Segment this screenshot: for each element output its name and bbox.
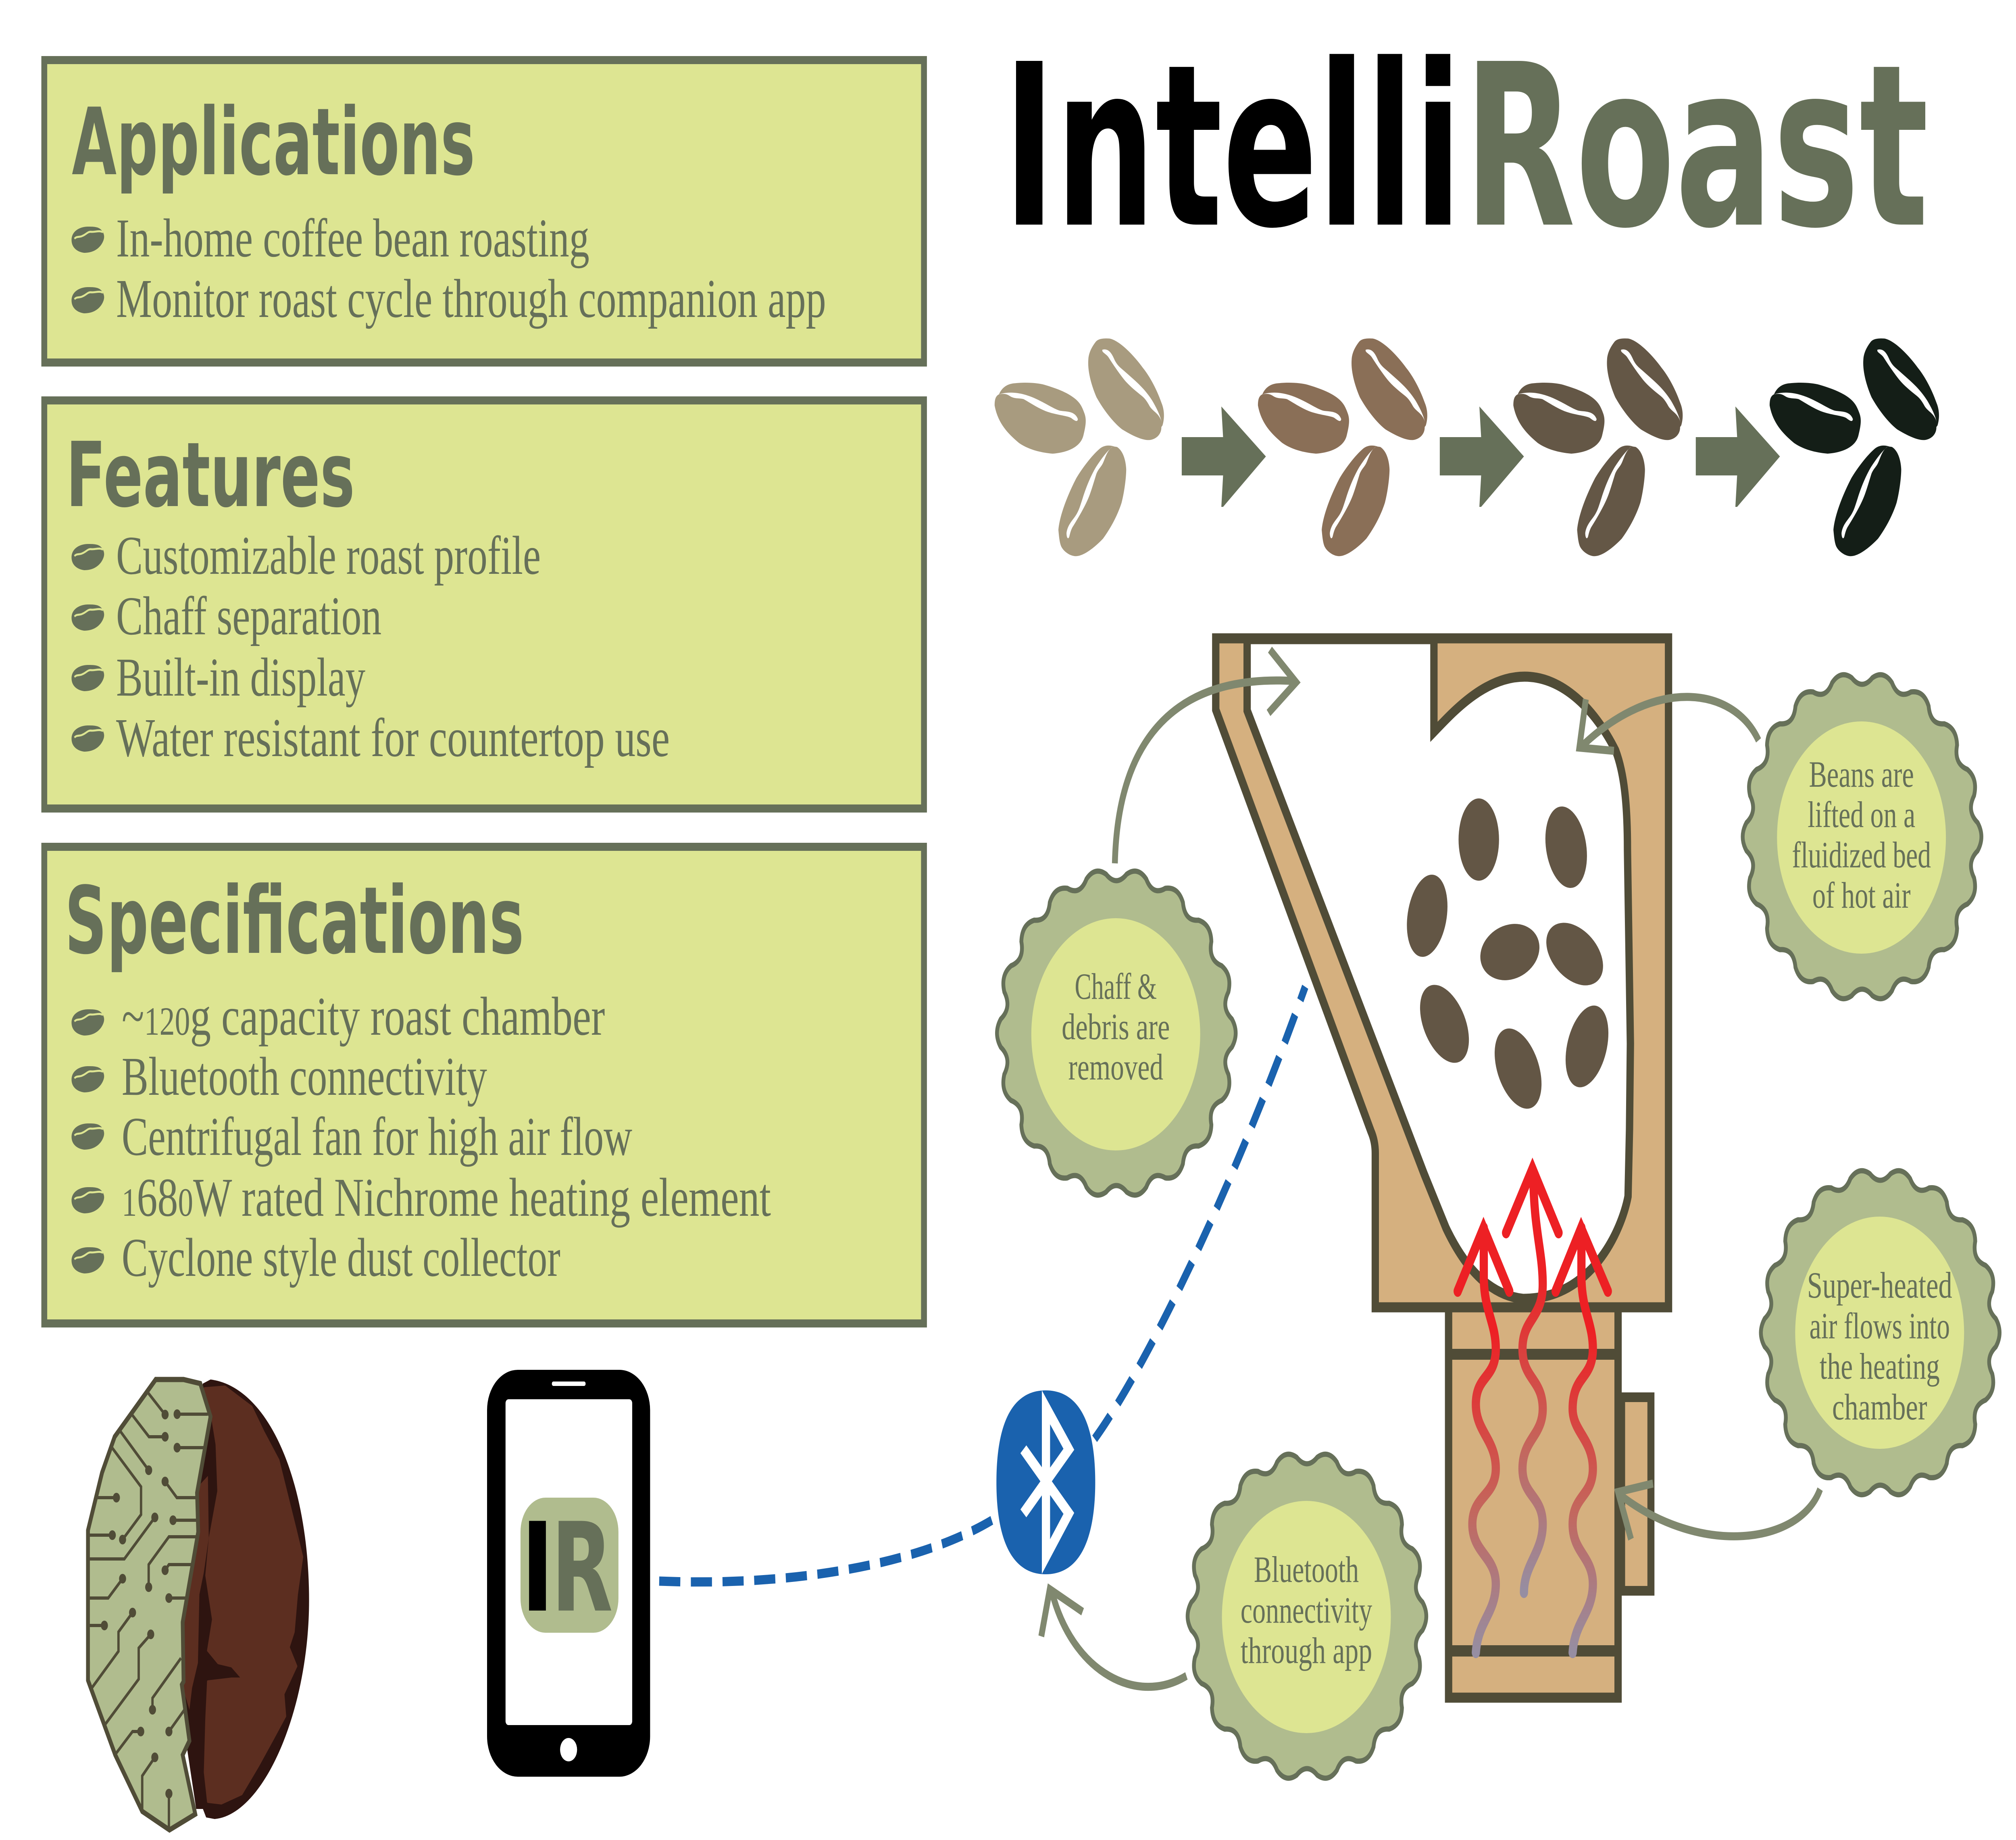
bullet list: features: [71, 525, 670, 768]
arrow: roast step 2: [1440, 406, 1524, 507]
bullet list: specifications: Cyclone style dust collector: [122, 1227, 560, 1288]
callout: beans lifted: [1743, 675, 1981, 999]
panel: applications: [44, 60, 924, 363]
heading: applications: Applications: [72, 88, 475, 196]
callout: chaff and debris: removed: [1068, 1047, 1163, 1088]
callout: super-heated air: Super-heated: [1807, 1265, 1952, 1306]
callout: beans lifted: lifted on a: [1808, 794, 1915, 836]
panel: specifications: [44, 847, 924, 1323]
bullet list: specifications: ~120g capacity roast chamber: [122, 986, 605, 1047]
callout: super-heated air: the heating: [1820, 1346, 1940, 1387]
icon: dark roast beans: [1770, 338, 1939, 556]
bullet list: applications: Monitor roast cycle through companion app: [116, 268, 826, 329]
icon: bluetooth: [996, 1390, 1095, 1574]
heading: specifications: Specifications: [65, 867, 524, 975]
heating chamber: [1445, 1307, 1651, 1698]
bullet list: specifications: [71, 986, 771, 1288]
callout: chaff and debris: [997, 871, 1236, 1195]
callout arrow: bluetooth: [1041, 1589, 1187, 1687]
callout: beans lifted: Beans are: [1809, 754, 1914, 795]
bullet list: specifications: Bluetooth connectivity: [122, 1046, 487, 1107]
callout arrow: chaff to exit: [1115, 650, 1296, 863]
callout: beans lifted: fluidized bed: [1792, 835, 1931, 876]
icon: smartphone with IR app: I: [521, 1496, 554, 1640]
coffee beans in chamber: [1401, 798, 1616, 1120]
arrow: roast step 1: [1182, 406, 1266, 507]
heading: features: Features: [66, 423, 355, 527]
bullet list: applications: In-home coffee bean roasting: [116, 208, 589, 269]
hot air arrows: [1458, 1169, 1608, 1652]
icon: light roast beans: [1258, 338, 1427, 556]
roast progression: beans and arrows: [995, 338, 1939, 556]
arrow: roast step 3: [1696, 406, 1780, 507]
callout: chaff and debris: Chaff &: [1075, 966, 1157, 1007]
callout: bluetooth connectivity: connectivity: [1241, 1590, 1372, 1631]
callout: beans lifted: of hot air: [1812, 875, 1911, 916]
icon: medium roast beans: [1513, 338, 1683, 556]
callout: bluetooth connectivity: [1187, 1454, 1426, 1778]
callout: bluetooth connectivity: Bluetooth: [1254, 1549, 1359, 1590]
dashed connection: phone to bluetooth: [659, 1516, 999, 1582]
callout arrow: beans lifted: [1579, 697, 1758, 751]
icon: green beans: [995, 338, 1164, 556]
callout: super-heated air: air flows into: [1810, 1306, 1950, 1347]
callout: chaff and debris: debris are: [1062, 1006, 1170, 1048]
roast chamber cavity: [1247, 639, 1631, 1299]
dashed connection: bluetooth to roaster: [1095, 987, 1305, 1439]
title: [1003, 16, 1929, 278]
bullet list: specifications: Centrifugal fan for high air flow: [122, 1106, 632, 1167]
bullet list: features: Water resistant for countertop use: [116, 707, 670, 768]
callout: super-heated air: chamber: [1832, 1387, 1927, 1428]
roast chamber housing: [1216, 638, 1668, 1307]
icon: circuit coffee bean: [88, 1379, 309, 1830]
callout arrow: air inlet: [1618, 1484, 1820, 1539]
panel: features: [44, 400, 924, 809]
roaster machine diagram: [1216, 638, 1668, 1698]
title: Intelli: [1003, 16, 1462, 278]
callout: super-heated air: [1761, 1171, 1999, 1495]
title: Roast: [1464, 16, 1929, 278]
bullet list: features: Built-in display: [116, 647, 365, 708]
callout: bluetooth connectivity: through app: [1241, 1630, 1372, 1671]
icon: smartphone with IR app: [487, 1370, 650, 1777]
bullet list: applications: [71, 208, 826, 329]
bullet list: features: Chaff separation: [116, 586, 381, 646]
icon: smartphone with IR app: R: [551, 1496, 613, 1640]
bullet list: specifications: 1680W rated Nichrome heating element: [122, 1167, 771, 1228]
bullet list: features: Customizable roast profile: [116, 525, 541, 586]
